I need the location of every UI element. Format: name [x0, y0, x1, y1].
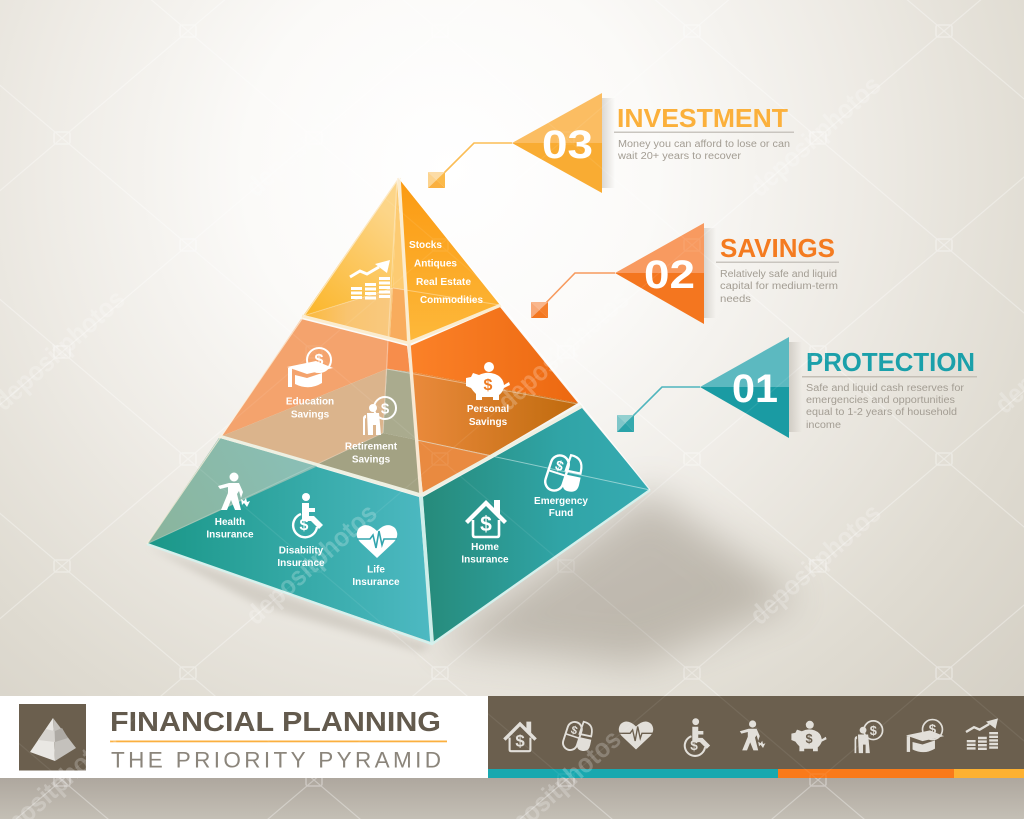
marker square: [531, 302, 548, 318]
connector line: [437, 143, 512, 180]
heading rule: [614, 132, 794, 133]
tier 3 list: real estate: Real Estate: [416, 277, 471, 288]
icon: piggy bank: [466, 362, 510, 400]
icon: emergency pills: $: [553, 457, 566, 474]
colour strip: savings: [778, 769, 954, 778]
title rule: [110, 740, 447, 742]
marker square: [617, 415, 634, 432]
icon: graduation cap with coin: $: [315, 352, 324, 369]
bar icon: pills: $: [569, 724, 580, 738]
description: wait 20+ years to recover: [617, 151, 742, 162]
icon: home with dollar: $: [480, 513, 492, 536]
heading: INVESTMENT: [617, 103, 788, 133]
subtitle: THE PRIORITY PYRAMID: [111, 748, 441, 772]
description: needs: [720, 294, 751, 305]
label: personal savings: Savings: [469, 417, 508, 428]
label: health insurance: Insurance: [206, 530, 254, 540]
icon: retirement person with coin: $: [381, 400, 390, 418]
bar icon: retirement: [855, 721, 883, 753]
bar icon: wheelchair: $: [690, 738, 698, 753]
bar icon: heart: [619, 722, 653, 749]
heading: PROTECTION: [806, 347, 975, 377]
description: equal to 1-2 years of household: [806, 407, 957, 418]
pointer triangle: [512, 93, 602, 193]
heading rule: [802, 376, 977, 378]
pyramid shadow: [147, 490, 800, 665]
label: emergency fund: Emergency: [534, 496, 588, 507]
triangle shadow: [789, 342, 802, 432]
icon: growth chart and coins: [350, 260, 390, 300]
description: Money you can afford to lose or can: [618, 139, 790, 150]
number: 03: [542, 123, 593, 167]
bar icon: injured person: [740, 720, 765, 750]
icon: wheelchair with dollar: [293, 493, 323, 537]
bar icon: graduation cap: $: [929, 722, 937, 737]
number: 02: [644, 253, 695, 297]
description: Safe and liquid cash reserves for: [806, 383, 965, 394]
label: disability insurance: Disability: [279, 546, 323, 556]
description: Relatively safe and liquid: [720, 269, 837, 280]
bar icon: piggy bank: $: [805, 731, 813, 746]
heading rule: [716, 262, 839, 263]
tier 3: investment, right face: [400, 180, 500, 342]
bar icon: home: [503, 722, 537, 751]
callout 01: protection: [617, 337, 977, 438]
connector line: [540, 273, 615, 309]
pyramid inner edge lines: [147, 178, 650, 644]
icon: heart with pulse: [357, 525, 397, 558]
bar icon: piggy bank: [791, 721, 827, 751]
colour strip: protection: [488, 769, 778, 778]
description: capital for medium-term: [720, 281, 838, 292]
tier 3: investment, left face: [303, 180, 407, 342]
title panel: [0, 696, 488, 778]
label: retirement savings: Savings: [352, 454, 391, 466]
icon: graduation cap with coin: [287, 348, 333, 387]
main title: FINANCIAL PLANNING: [110, 706, 441, 737]
number: 01: [732, 367, 778, 411]
bar icon: wheelchair: [685, 718, 710, 756]
label: emergency fund: Fund: [549, 508, 573, 519]
bar icon: pills: [561, 720, 595, 752]
watermark overlay: depositphotos: [744, 498, 887, 630]
watermark overlay: depositphotos: [744, 70, 887, 202]
bar icon: graduation cap: [906, 720, 944, 752]
marker square: [428, 172, 445, 188]
watermark overlay: depositphotos: [240, 498, 383, 630]
tier 2: savings, left face: [222, 319, 420, 494]
icon: piggy bank: $: [484, 377, 493, 394]
connector line: [626, 387, 700, 423]
pointer triangle: [615, 223, 704, 324]
tier 1: protection, right face: [423, 408, 650, 643]
label: home insurance: Insurance: [461, 554, 509, 566]
callout 02: savings: [531, 223, 839, 324]
triangle shadow: [703, 228, 716, 318]
icon: emergency pills: [543, 453, 585, 493]
triangle shadow: [602, 98, 615, 188]
tier 3 list: commodities: Commodities: [420, 295, 483, 306]
label: education savings: Education: [286, 396, 334, 408]
label: life insurance: Life: [367, 564, 385, 576]
heading: SAVINGS: [720, 233, 835, 263]
bar icon: home: $: [515, 731, 525, 750]
tier 2: savings, right face: [410, 307, 578, 494]
icon: injured walking person: [218, 472, 250, 510]
bar icon: growth chart: [966, 718, 998, 750]
icon: wheelchair with dollar: $: [300, 517, 309, 534]
label: home insurance: Home: [471, 542, 499, 553]
watermark overlay: depositphotos: [492, 284, 635, 416]
colour strip: investment: [954, 769, 1024, 778]
pyramid: [147, 178, 650, 644]
tier 3 list: antiques: Antiques: [414, 258, 457, 270]
icon: retirement person with coin: [363, 397, 396, 435]
description: income: [806, 420, 841, 431]
watermark overlay: depositphotos: [240, 70, 383, 202]
callout 03: investment: [428, 93, 794, 193]
label: disability insurance: Insurance: [277, 558, 325, 569]
bar icon: retirement: $: [870, 723, 877, 738]
tier 3 list: stocks: Stocks: [409, 240, 442, 251]
label: retirement savings: Retirement: [345, 442, 397, 452]
description: emergencies and opportunities: [806, 395, 955, 406]
label: education savings: Savings: [291, 410, 330, 420]
icon bar: [488, 696, 1024, 778]
logo: small pyramid: [19, 704, 86, 770]
label: personal savings: Personal: [467, 404, 509, 415]
pointer triangle: [700, 337, 789, 438]
tier 1: protection, left face: [147, 438, 431, 642]
label: health insurance: Health: [215, 517, 245, 528]
label: life insurance: Insurance: [352, 577, 400, 588]
icon: home with dollar: [465, 500, 507, 537]
